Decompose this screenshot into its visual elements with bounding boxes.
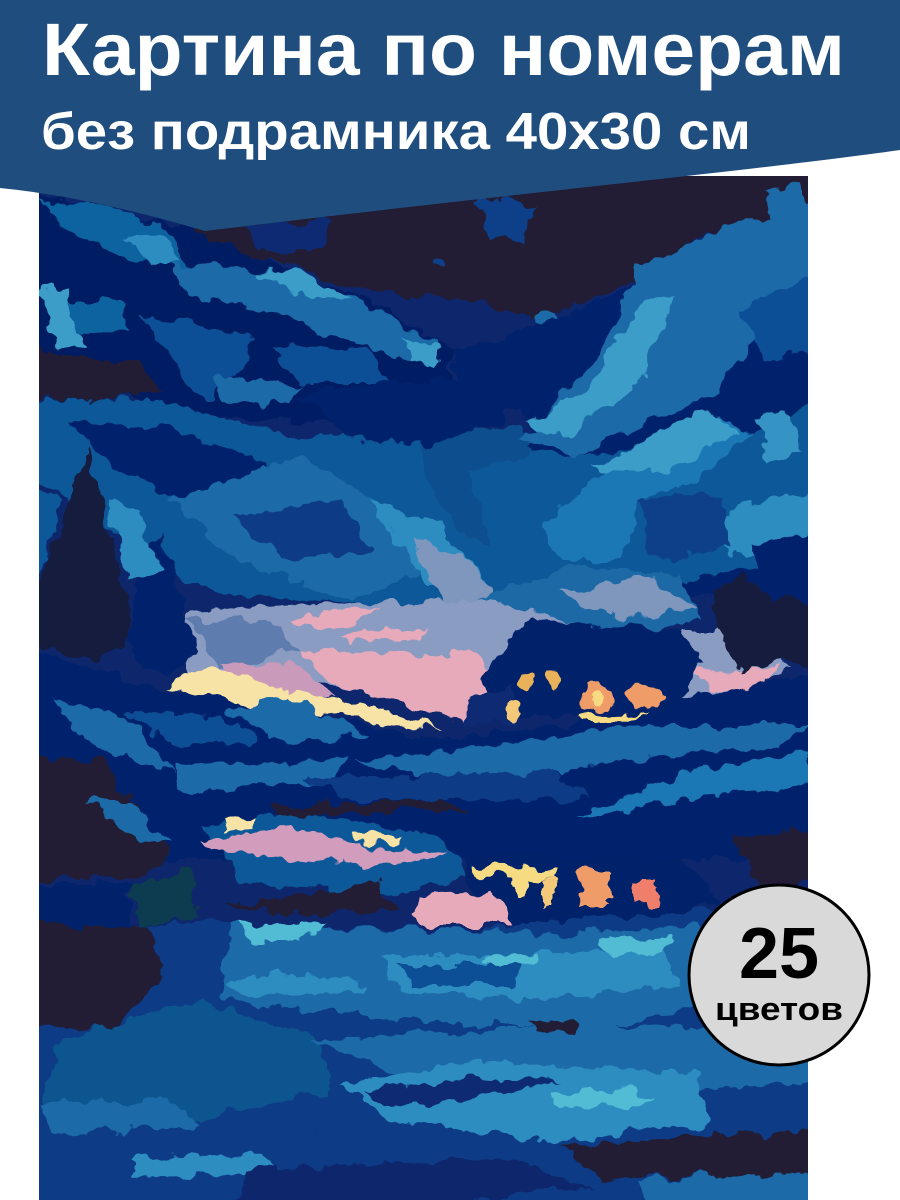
tree right [712,534,808,674]
header banner [0,0,900,231]
subtitle: без подрамника 40х30 см [41,103,751,161]
sky: right clouds [470,205,830,640]
lake [20,812,830,1200]
sky: left clouds [20,190,450,425]
trees left [39,446,198,676]
badge number: 25 [739,914,819,994]
hills below horizon [20,650,830,860]
house [465,618,705,725]
sky: sunset glow at the horizon [165,600,790,730]
sky: band of clouds above the horizon [39,321,546,606]
sky: dark top area [194,176,808,325]
badge: 25 colours [689,885,869,1065]
painting: night lake with house [20,160,830,1200]
dark shore left [20,755,200,1030]
title: Картина по номерам [42,8,845,91]
badge label: цветов [715,991,843,1027]
dark shore right [732,826,808,886]
